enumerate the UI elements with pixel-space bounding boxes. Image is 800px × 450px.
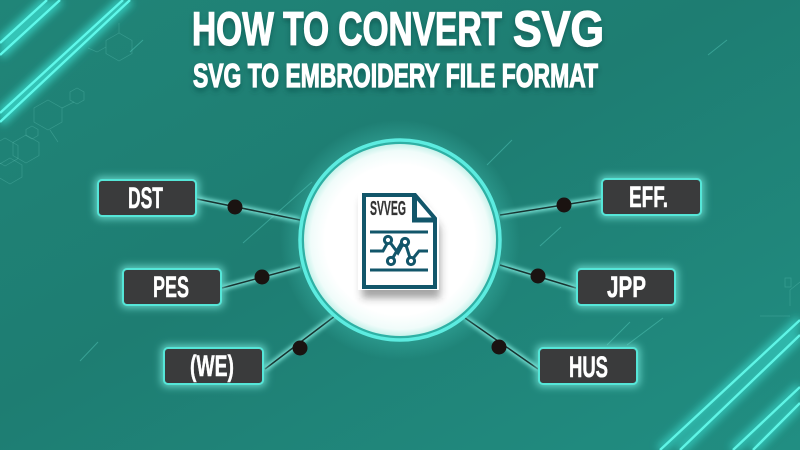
hexagon pattern: top left: [0, 23, 800, 316]
label: DST: DST: [128, 182, 163, 215]
label: EFF.: EFF.: [629, 181, 668, 214]
title shadow: [192, 4, 604, 98]
title shadow: HOW TO CONVERT: [192, 7, 502, 60]
connector dots: [228, 198, 572, 356]
label: (WE): [161, 345, 266, 387]
title accent: SVG: [513, 1, 604, 57]
neon diagonal lines: bottom right: [660, 320, 800, 450]
label: DST: [95, 177, 199, 219]
connectors: [197, 198, 601, 369]
label: PES: PES: [153, 271, 189, 304]
title: [192, 1, 604, 98]
title line 1: HOW TO CONVERT: [192, 2, 502, 55]
title shadow: SVG: [512, 4, 604, 60]
label: PES: [120, 266, 224, 308]
label: HUS: [536, 345, 640, 387]
label: JPP: JPP: [607, 271, 646, 304]
label: (WE): (WE): [190, 350, 234, 383]
faint accent dashes: [80, 40, 727, 361]
icon: SVG document: [358, 191, 440, 298]
neon diagonal lines: top left: [0, 0, 130, 122]
label: JPP: [574, 266, 678, 308]
central circle: [280, 120, 520, 360]
label: HUS: HUS: [569, 351, 608, 384]
title shadow: SVG TO EMBROIDERY FILE FORMAT: [193, 62, 598, 98]
icon label: SVVEG: [370, 198, 406, 220]
label: EFF.: [599, 176, 704, 218]
subtitle: SVG TO EMBROIDERY FILE FORMAT: [193, 57, 598, 94]
